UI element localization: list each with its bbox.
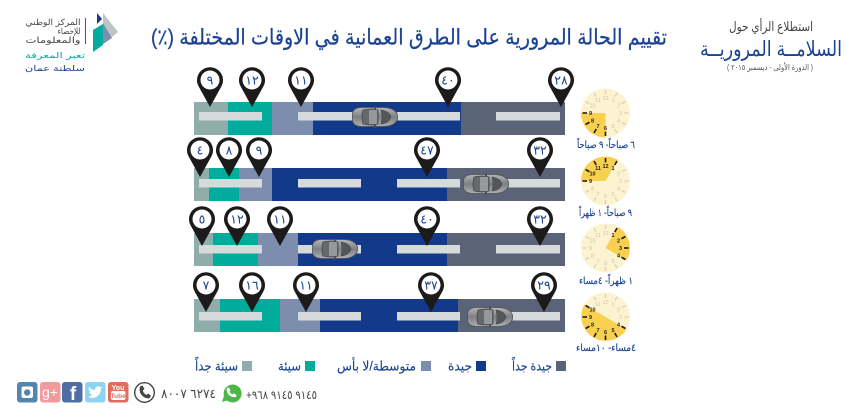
phone number: ٨٠٠٧ ٦٢٧٤ — [161, 386, 216, 401]
clock 2: 9 am-1 pm: 7 — [596, 192, 600, 198]
car — [312, 238, 358, 260]
legend: medium: متوسطة/لا بأس — [337, 356, 416, 374]
legend: bad — [278, 358, 315, 374]
clock 1: 6-9 am: 4 — [617, 118, 620, 124]
pin: 4 — [187, 137, 213, 177]
clock 4: 4-10 pm: 9 — [589, 315, 592, 321]
clock 3: 1-4 pm: 8 — [591, 254, 594, 260]
stacked bar segments — [194, 233, 565, 266]
clock 3: 1-4 pm: 2 — [617, 238, 620, 244]
legend: good — [448, 358, 486, 374]
pin: 47: ٤٧ — [420, 144, 434, 158]
pin: 32 — [527, 137, 553, 177]
survey edition: ( الدورة الأولى - ديسمبر ٢٠١٥ ) — [727, 62, 813, 72]
clock 2: 9 am-1 pm: 6 — [604, 194, 607, 200]
pin: 7: ٧ — [203, 278, 210, 292]
pin: 9: ٩ — [256, 144, 263, 158]
clock 2: 9 am-1 pm: 9 — [589, 179, 592, 185]
pin: 8: ٨ — [226, 144, 233, 158]
stacked bar segments — [194, 299, 565, 332]
pin: 9 — [246, 137, 272, 177]
pin: 12 — [239, 67, 265, 107]
pin: 11 — [267, 206, 293, 246]
icon: instagram — [17, 382, 38, 402]
clock 3: 1-4 pm: 10 — [589, 238, 596, 244]
title: تقييم الحالة المرورية على الطرق العمانية في الاوقات المختلفة (٪) — [151, 24, 667, 50]
pin: 11: ١١ — [273, 212, 287, 226]
clock 1: 6-9 am: 7 — [596, 124, 600, 130]
logo icon — [93, 13, 118, 52]
icon: phone — [135, 383, 154, 402]
clock 4: 4-10 pm: 3 — [619, 315, 622, 321]
pin: 11 — [293, 272, 319, 312]
logo tagline: تعبر المعرفة — [25, 51, 85, 60]
clock 1: 6-9 am: 6 — [604, 126, 607, 132]
clock 4: 4-10 pm: 7 — [596, 328, 600, 334]
road row 2: 9 am-1 pm — [187, 137, 565, 201]
clock 3: 1-4 pm: 6 — [604, 261, 607, 267]
pin: 32: ٣٢ — [533, 212, 547, 226]
clock 3: 1-4 pm — [581, 224, 630, 272]
clock 3: 1-4 pm: 12 — [602, 231, 609, 237]
icon: youtube: Tube — [111, 393, 126, 400]
car — [464, 173, 508, 195]
pin: 16 — [239, 272, 265, 312]
clock 3: 1-4 pm: 4 — [617, 254, 621, 260]
clock 1: 6-9 am: 8 — [591, 118, 594, 124]
footer contacts — [17, 382, 317, 405]
stacked bar segments — [194, 168, 565, 201]
clock 3: 1-4 pm: 9 — [589, 246, 592, 252]
clock 2: 9 am-1 pm — [581, 156, 630, 206]
icon: facebook: f — [70, 384, 77, 405]
pin: 37: ٣٧ — [424, 278, 438, 292]
clock 2: 9 am-1 pm: 4 — [617, 186, 620, 192]
icon: google plus — [40, 382, 60, 402]
pin: 32 — [527, 206, 553, 246]
pin: 11: ١١ — [299, 278, 313, 292]
pin: 8 — [216, 137, 242, 177]
icon: whatsapp — [222, 384, 242, 402]
clock 1: 6-9 am: 1 — [611, 98, 615, 104]
icon: twitter — [85, 382, 106, 402]
pin: 9: ٩ — [207, 74, 214, 88]
clock 1: 6-9 am: 5 — [611, 124, 615, 130]
legend: very good: جيدة جداً — [512, 357, 552, 374]
clock 3 label: ١ ظهراً- ٤مساء — [579, 273, 633, 287]
logo country: سلطنة عمان — [25, 64, 85, 73]
pin: 29: ٢٩ — [537, 278, 551, 292]
car — [352, 106, 398, 128]
clock 3: 1-4 pm: 3 — [619, 246, 622, 252]
logo text: للإحصاء — [58, 26, 80, 37]
icon: google plus: g+ — [42, 384, 58, 400]
clock 2: 9 am-1 pm: 12 — [602, 164, 609, 170]
clock 1: 6-9 am: 9 — [589, 111, 592, 117]
clock 2: 9 am-1 pm: 2 — [617, 172, 620, 178]
clock 4: 4-10 pm: 8 — [591, 322, 594, 328]
survey intro: استطلاع الرأي حول — [729, 18, 813, 35]
logo text — [26, 17, 80, 45]
legend: bad: سيئة — [278, 358, 301, 374]
clock 4: 4-10 pm: 4 — [617, 322, 621, 328]
road row 4: 4-10 pm — [193, 272, 565, 332]
clock 2: 9 am-1 pm: 10 — [589, 172, 596, 178]
clock 2: 9 am-1 pm: 3 — [619, 179, 622, 185]
logo text: والمعلومات — [26, 35, 80, 45]
clock 2: 9 am-1 pm: 11 — [595, 166, 601, 172]
pin: 12: ١٢ — [230, 212, 244, 226]
clock 4: 4-10 pm: 10 — [589, 308, 596, 314]
pin: 40: ٤٠ — [441, 74, 455, 88]
survey heading — [700, 18, 842, 72]
survey name: السلامــة المروريــة — [700, 38, 842, 61]
clock 2: 9 am-1 pm: 5 — [611, 192, 615, 198]
clock 4: 4-10 pm: 2 — [617, 308, 620, 314]
legend: very bad: سيئة جداً — [195, 357, 238, 374]
logo divider — [85, 18, 86, 44]
clock 1: 6-9 am: 2 — [617, 104, 620, 110]
logo: national centre for statistics and information — [25, 13, 118, 73]
stacked bar segments — [194, 102, 565, 135]
clock 4: 4-10 pm: 5 — [611, 328, 615, 334]
pin: 9 — [197, 67, 223, 107]
legend: good: جيدة — [448, 358, 472, 374]
icon: youtube — [108, 382, 128, 402]
road row 1: 6-9 am — [194, 67, 574, 135]
clock 4: 4-10 pm: 12 — [602, 300, 609, 306]
clock 2 label: ٩ صباحاً- ١ ظهراً — [579, 205, 632, 219]
pin: 5: ٥ — [199, 212, 205, 226]
road row 3: 1-4 pm — [189, 206, 565, 266]
logo text: المركز الوطني — [26, 17, 80, 27]
pin: 4: ٤ — [197, 144, 203, 158]
pin: 40 — [435, 67, 461, 107]
icon: youtube: You — [112, 385, 124, 392]
whatsapp number: +٩٦٨ ٩١٤٥ ٩١٤٥ — [246, 388, 317, 402]
clock 3: 1-4 pm: 1 — [611, 233, 615, 239]
legend — [195, 356, 566, 374]
pin: 32: ٣٢ — [533, 144, 547, 158]
pin: 12: ١٢ — [245, 74, 259, 88]
clock 4: 4-10 pm: 6 — [604, 330, 607, 336]
pin: 7 — [193, 272, 219, 312]
clock 1: 6-9 am: 12 — [602, 96, 609, 102]
clock 2: 9 am-1 pm: 1 — [611, 166, 615, 172]
pin: 47 — [414, 137, 440, 177]
pin: 40 — [414, 206, 440, 246]
clock 3: 1-4 pm: 11 — [595, 233, 601, 239]
clock 1: 6-9 am: 11 — [595, 98, 601, 104]
pin: 16: ١٦ — [245, 278, 259, 292]
clock 3: 1-4 pm: 5 — [611, 259, 615, 265]
pin: 11: ١١ — [294, 74, 308, 88]
pin: 37 — [418, 272, 444, 312]
clock 4: 4-10 pm: 1 — [611, 302, 615, 308]
icon: facebook — [62, 382, 82, 405]
car — [468, 306, 512, 328]
pin: 29 — [531, 272, 557, 312]
clock 3: 1-4 pm: 7 — [596, 259, 600, 265]
clock 1: 6-9 am: 3 — [619, 111, 622, 117]
clock 4 label: ٤مساء- ١٠مساء — [576, 343, 636, 354]
pin: 40: ٤٠ — [420, 212, 434, 226]
pin: 28 — [548, 67, 574, 107]
clock 4: 4-10 pm: 11 — [595, 302, 601, 308]
clock 1 label: ٦ صباحاً- ٩ صباحاً — [577, 137, 635, 151]
pin: 28: ٢٨ — [554, 74, 568, 88]
clock 2: 9 am-1 pm: 8 — [591, 186, 594, 192]
pin: 5 — [189, 206, 215, 246]
pin: 12 — [224, 206, 250, 246]
pin: 11 — [288, 67, 314, 107]
clock 1: 6-9 am — [581, 88, 630, 138]
clock 4: 4-10 pm — [581, 292, 630, 342]
clock 1: 6-9 am: 10 — [589, 104, 596, 110]
